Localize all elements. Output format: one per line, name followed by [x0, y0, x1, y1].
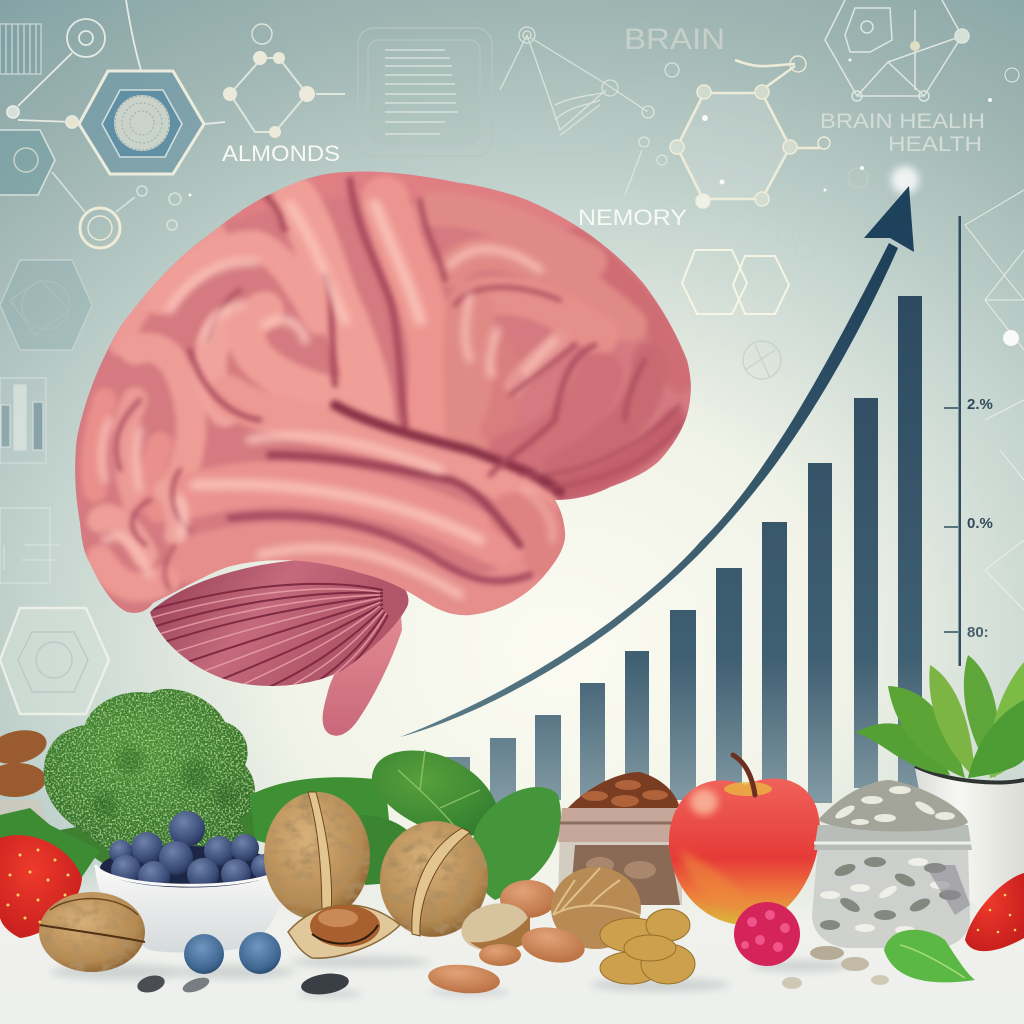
icon: top right hexagon [825, 0, 969, 101]
icon: center right hexagon [670, 56, 830, 208]
strawberry left [0, 808, 100, 938]
mint leaf [884, 930, 975, 982]
small nuts [427, 867, 641, 996]
raspberry [734, 902, 800, 966]
labels in the diagram overlay [222, 23, 985, 230]
walnut left [39, 892, 145, 972]
table surface [0, 860, 1024, 1024]
icon: small hexagon network [223, 24, 345, 138]
icon: twin hexagons [682, 250, 789, 314]
apple [669, 755, 820, 925]
axis value middle: 0.% [967, 515, 993, 532]
icon: network top center [500, 27, 679, 195]
axis value bottom: 80: [967, 624, 989, 641]
arrow tip glow [891, 166, 919, 194]
icon: right edge network [965, 68, 1024, 610]
loose blueberries [184, 932, 281, 974]
tech diagram overlay [0, 0, 1024, 714]
gyri [93, 179, 680, 597]
gyrus highlights [102, 205, 555, 595]
bowl of blueberries [95, 811, 288, 952]
icon: central hexagon top left [79, 71, 204, 174]
icon: left notes panel [0, 508, 60, 583]
icon: left bars panel [0, 378, 46, 463]
broccoli [44, 689, 257, 870]
cerebellum [150, 560, 408, 686]
icon: bottom-left hexagon [0, 608, 109, 714]
icon: square grid top left [0, 24, 41, 74]
almonds left [0, 725, 50, 835]
label: brain: BRAIN [624, 23, 725, 56]
jar of nuts [558, 772, 682, 905]
label: almonds: ALMONDS [222, 141, 340, 166]
icon: faint molecule [743, 168, 868, 379]
label: memory: NEMORY [578, 205, 687, 230]
walnut halves [600, 909, 695, 984]
walnut center [371, 813, 497, 945]
brain stem [323, 600, 402, 736]
scattered seeds [135, 946, 889, 997]
bar chart [445, 296, 922, 808]
icon: hexagon circuit left [0, 260, 92, 350]
table shadows [50, 956, 850, 998]
jar of seeds [812, 780, 972, 948]
food group [0, 655, 1024, 997]
cerebrum [75, 172, 691, 616]
arrow head [864, 186, 914, 252]
back spinach leaves [250, 750, 561, 900]
growth arrow [400, 186, 914, 737]
chart axis [944, 216, 993, 666]
strawberry right [965, 873, 1024, 951]
connector network top left [7, 0, 225, 128]
icon: left hexagon mid [0, 130, 181, 248]
potted plant [855, 655, 1024, 910]
axis value top: 2.% [967, 396, 993, 413]
sulci [116, 180, 680, 590]
label: brain health: BRAIN HEALIH [820, 110, 985, 133]
almond in shell [288, 905, 400, 958]
icon: document square [358, 28, 492, 156]
walnut center left [264, 792, 370, 920]
label: health: HEALTH [888, 133, 982, 156]
brain [60, 160, 710, 736]
glowing particles [188, 58, 992, 196]
